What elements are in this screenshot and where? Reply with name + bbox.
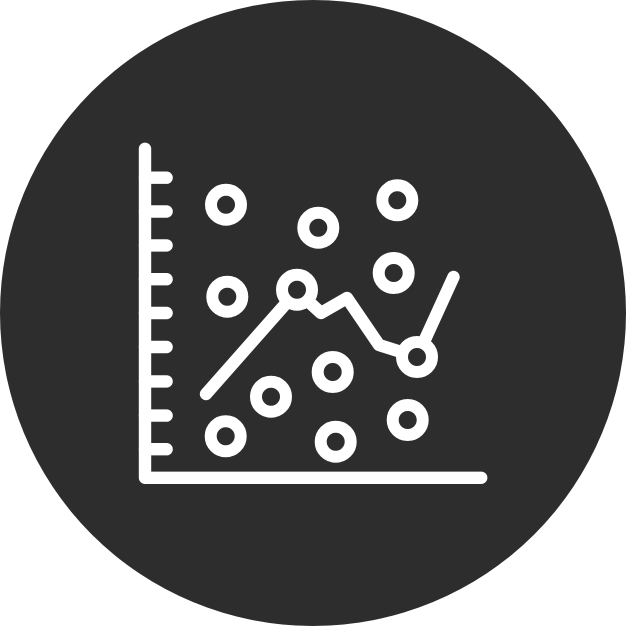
line markers — [282, 275, 432, 372]
trend line — [206, 277, 454, 394]
scatter points — [211, 185, 423, 457]
chart axes with tick marks — [145, 149, 481, 478]
